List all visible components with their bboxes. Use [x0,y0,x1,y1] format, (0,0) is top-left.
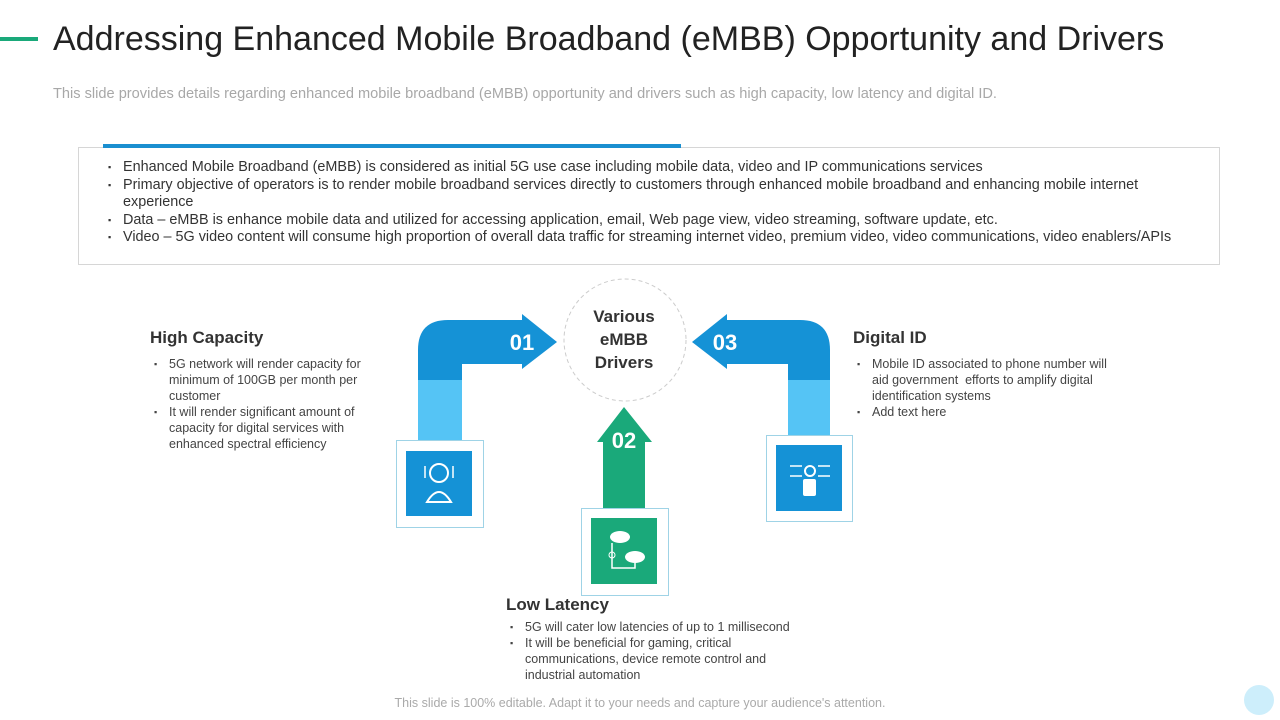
corner circle [1244,685,1274,715]
text block: low latency: 5G will cater low latencies of up to 1 millisecond [525,620,790,634]
text block: high capacity: High Capacity [150,328,263,347]
arrow 03: 03 [713,330,737,355]
arrow 03 [692,314,830,438]
arrow 01: 01 [510,330,534,355]
text block: low latency: It will be beneficial for gaming, critical communications, device remote control and industrial automation [525,636,766,682]
title accent line [0,37,38,41]
accent bar [103,144,681,148]
center circle: eMBB [600,330,648,349]
text block: digital id [853,328,1107,419]
bullet list: Data – eMBB is enhance mobile data and utilized for accessing application, email, Web page view, video streaming, software update, etc. [123,212,998,228]
text block: low latency [506,595,790,682]
text block: digital id: Mobile ID associated to phone number will aid government efforts to amplify digital identification systems [872,357,1107,403]
panel: overview bullets [78,147,1220,265]
bullet list: Primary objective of operators is to render mobile broadband services directly to customers through enhanced mobile broadband and enhancing mobile internet experience [123,177,1138,210]
text block: high capacity [150,328,361,451]
arrow 01 [418,314,557,442]
icon box: high capacity [396,440,484,528]
center circle [564,279,686,401]
icon box: low latency [582,508,668,596]
text block: digital id: Add text here [872,405,946,419]
arrow 02: 02 [612,428,636,453]
subtitle: This slide provides details regarding enhanced mobile broadband (eMBB) opportunity and drivers such as high capacity, low latency and digital ID. [53,86,997,102]
center circle: Drivers [595,353,653,372]
text block: digital id: Digital ID [853,328,927,347]
bullet list [108,159,1171,245]
center circle: Various [593,307,655,326]
text block: high capacity: 5G network will render capacity for minimum of 100GB per month per customer [169,357,361,403]
text block: low latency: Low Latency [506,595,609,614]
arrow 02 [597,407,652,510]
text block: high capacity: It will render significant amount of capacity for digital services with enhanced spectral efficiency [169,405,355,451]
bullet list: Enhanced Mobile Broadband (eMBB) is considered as initial 5G use case including mobile data, video and IP communications services [123,159,983,175]
icon box: digital id [766,436,852,522]
bullet list: Video – 5G video content will consume high proportion of overall data traffic for streaming internet video, premium video, video communications, video enablers/APIs [123,229,1171,245]
footer: This slide is 100% editable. Adapt it to your needs and capture your audience's attention. [395,696,885,710]
title: Addressing Enhanced Mobile Broadband (eMBB) Opportunity and Drivers [53,20,1164,58]
